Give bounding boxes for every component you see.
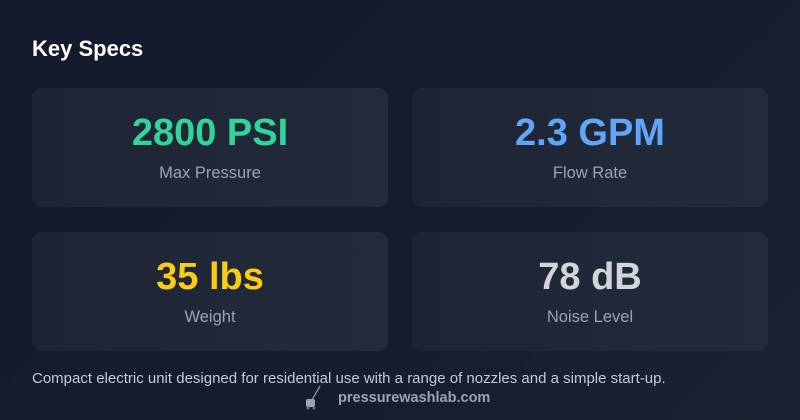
value: flow: 2.3 GPM [515, 112, 665, 154]
panel: flow rate [412, 88, 768, 207]
brand footer: pressurewashlab.com [338, 390, 490, 406]
label: flow: Flow Rate [553, 164, 627, 182]
value: noise: 78 dB [538, 256, 642, 298]
icon: pressure washer [306, 386, 320, 410]
label: weight: Weight [184, 308, 236, 326]
title: Key Specs [32, 36, 143, 61]
panel: noise [412, 232, 768, 351]
value: pressure: 2800 PSI [132, 112, 288, 154]
description text: Compact electric unit designed for residential use with a range of nozzles and a simple start-up. [32, 370, 666, 387]
panel: weight [32, 232, 388, 351]
panel: max pressure [32, 88, 388, 207]
label: noise: Noise Level [547, 308, 633, 326]
label: pressure: Max Pressure [159, 164, 261, 182]
value: weight: 35 lbs [156, 256, 264, 298]
brand footer [306, 386, 490, 410]
